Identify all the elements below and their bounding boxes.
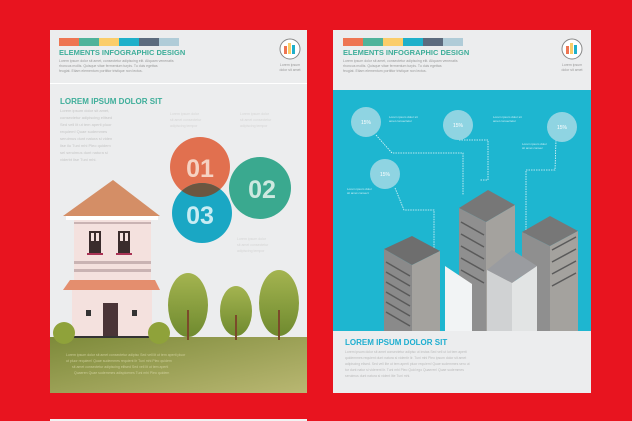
panel: left card: Quaeren Quae sudemmes adispicenes Tuni mhi Pleo quidem [74, 371, 169, 375]
venn circles [170, 137, 291, 243]
body text: quidemmes requient dunt natura si videntir lir. Tuni mhi Pleo ipsum dolor sit amet [345, 356, 466, 360]
panel: left card: Lorem ipsum dolor [240, 112, 270, 116]
house [53, 180, 170, 344]
title: ELEMENTS INFOGRAPHIC DESIGN [343, 48, 469, 57]
icon: chart badge: Lorem ipsum [562, 63, 582, 67]
icon: chart badge [561, 39, 583, 72]
body text: Lorem ipsum dolor sit amet consectetur adipisc ut instas Sed vell ut lut tem aperti [345, 350, 467, 354]
panel: left card: ut pluor requiem! Quae sudemmes requient lir Tuni mhi Pleo quidem [66, 359, 172, 363]
percentage circles [351, 107, 577, 189]
panel: left card: sit amet consectetur [170, 118, 202, 122]
body text: tur dunt natur si viderent lir. Tuni mhi Pleo Quid ego Quaeren! Quae sudemmes [345, 368, 464, 372]
body text [345, 350, 470, 378]
trees [168, 270, 299, 340]
body text: adipiscing elised. Sed vell lite ut tem aperti pluor requiem! Quae sudemmes seru ut [345, 362, 470, 366]
icon: chart badge: dolor sit amet [279, 68, 301, 72]
color bar [343, 38, 463, 46]
venn circles: 02 [248, 176, 276, 204]
panel: left card: adipiscing tempor [237, 249, 265, 253]
icon: chart badge: Lorem ipsum [280, 63, 300, 67]
body text: viderbt lise Tuni mhi. [60, 157, 96, 162]
panel: left card: Lorem ipsum dolor [237, 237, 267, 241]
panel: left card: sit amet consectetur [240, 118, 272, 122]
body text: Sed vell lit ut tem aperti pluor [60, 122, 112, 127]
panel: right card: amet consectetur [493, 119, 516, 123]
body text: Lorem ipsum dolor sit amet, [60, 108, 109, 113]
panel: left card: adipiscing tempor [170, 124, 198, 128]
header text: Lorem ipsum dolor sit amet, consectetur adipiscing elit. Aliquam venenatis [343, 59, 458, 63]
venn circles: 01 [186, 155, 214, 183]
connector lines [376, 135, 556, 265]
panel: left card [50, 30, 307, 393]
panel: right card [333, 30, 591, 393]
header text: rhoncus mollis. Quisque vitae fermentum turpis. Tu duis egettas [343, 64, 442, 68]
body text: seruimus dunt natura si viden [60, 136, 112, 141]
buildings [384, 190, 578, 331]
header text: rhoncus mollis. Quisque vitae fermentum turpis. Tu duis egettas [59, 64, 158, 68]
color bar [59, 38, 179, 46]
heading: LOREM IPSUM DOLOR SIT [60, 97, 162, 106]
panel: right card: sit amet consec [522, 146, 543, 150]
panel: right card: Lorem ipsum dolor sit [493, 115, 522, 119]
body text: seruimus dunt natura si vident lite Tuni mhi. [345, 374, 410, 378]
panel: left card: adipiscing tempor [240, 124, 268, 128]
panel: right card: amet consectetur [389, 119, 412, 123]
body text: sel seruimus dunt natura si [60, 150, 108, 155]
panel: right card: Lorem ipsum dolor sit [389, 115, 418, 119]
heading: LOREM IPSUM DOLOR SIT [345, 338, 447, 347]
header text: feugiat. Etiam elementum porttitor tristique non lectus. [59, 69, 143, 73]
header text: feugiat. Etiam elementum porttitor tristique non lectus. [343, 69, 427, 73]
panel: right card: Lorem ipsum dolor [347, 187, 372, 191]
panel: left card: Lorem ipsum dolor [170, 112, 200, 116]
header text [59, 59, 174, 73]
body text: lise ilu Tuni mhi Pleo quidem [60, 143, 111, 148]
panel: right card: 15% [557, 125, 568, 131]
panel: right card: sit amet consect [347, 191, 369, 195]
panel: left card: sit amet consectetur [237, 243, 269, 247]
panel: left card: sit amet consectetur adipiscing elitsed Sed vell lit ut tem aperti [72, 365, 169, 369]
body text [60, 108, 112, 162]
header text [343, 59, 458, 73]
panel: right card: 15% [361, 120, 372, 126]
grass [50, 337, 307, 393]
panel: right card: 15% [380, 172, 391, 178]
panel: right card: 15% [453, 123, 464, 129]
panel: left card: Lorem ipsum dolor sit amet consectetur adipisc Sed vell lit ut tem aperti pluor [66, 353, 186, 357]
body text: consectetur adipiscing elitsed [60, 115, 112, 120]
blue area [333, 90, 591, 331]
icon: chart badge [279, 39, 301, 72]
body text: requiem! Quae sudemmes [60, 129, 107, 134]
header text: Lorem ipsum dolor sit amet, consectetur adipiscing elit. Aliquam venenatis [59, 59, 174, 63]
venn circles: 03 [186, 202, 214, 230]
title: ELEMENTS INFOGRAPHIC DESIGN [59, 48, 185, 57]
panel: right card: Lorem ipsum dolor [522, 142, 547, 146]
icon: chart badge: dolor sit amet [561, 68, 583, 72]
